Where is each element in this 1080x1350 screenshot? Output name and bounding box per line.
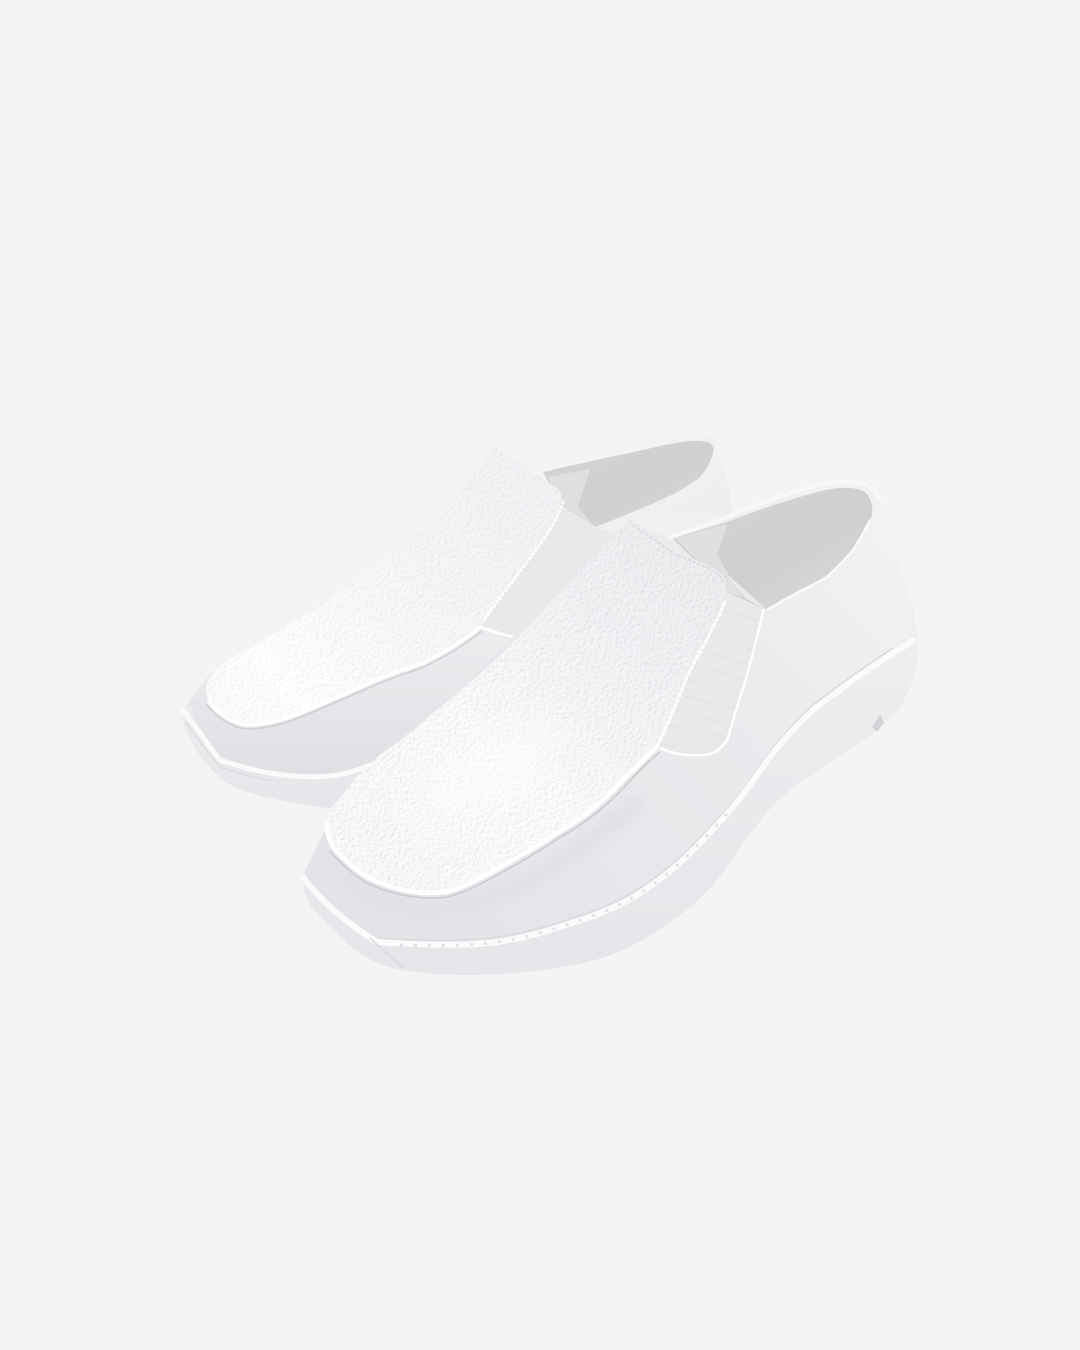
- back shoe rand and outsole: [183, 625, 525, 810]
- back shoe leather grain: [207, 448, 560, 723]
- front shoe seam shadow: [329, 752, 660, 898]
- back shoe seam shadow: [207, 631, 482, 729]
- front shoe lining partition: [675, 524, 743, 598]
- front shoe top stitching: [633, 525, 723, 584]
- front shoe insole peek: [728, 575, 767, 610]
- front shoe: [303, 482, 918, 975]
- front shoe inner lining: [672, 488, 872, 610]
- back shoe rand upper surface: [190, 627, 525, 777]
- back shoe lining partition: [548, 469, 595, 527]
- front shoe elastic ribbing: [669, 610, 760, 738]
- front shoe ridge stitch marks: [400, 807, 733, 946]
- front shoe rand shading: [345, 800, 640, 909]
- back shoe: [180, 430, 733, 810]
- front shoe vamp: [327, 519, 727, 893]
- front shoe vamp seam: [327, 747, 657, 893]
- front shoe inner collar edge: [767, 520, 870, 610]
- front shoe outsole tread: [872, 715, 884, 732]
- back shoe upper vamp: [206, 447, 562, 725]
- back shoe inner lining: [543, 441, 714, 527]
- front shoe sole ridge: [303, 640, 913, 945]
- front shoe elastic gusset: [660, 593, 763, 755]
- back shoe ridge shadow: [186, 722, 272, 781]
- front shoe outsole silhouette: [303, 500, 918, 975]
- front shoe elastic outer seam: [660, 609, 764, 755]
- back shoe elastic gusset: [480, 506, 640, 640]
- back shoe sole ridge: [183, 710, 370, 777]
- front shoe ridge inner shadow: [380, 648, 893, 940]
- back shoe seam: [208, 627, 480, 725]
- front shoe collar edge: [668, 482, 880, 538]
- product photo: pair of white slip-on shoes: [183, 440, 894, 975]
- back shoe stitching: [484, 500, 564, 620]
- front shoe vamp highlight: [417, 715, 561, 821]
- back shoe elastic lower seam: [480, 627, 525, 640]
- front shoe vamp side stitching: [657, 600, 725, 747]
- back shoe heel panel: [540, 434, 733, 545]
- front shoe toe break line: [370, 938, 403, 968]
- front shoe leather grain: [320, 510, 735, 900]
- front shoe quarter, heel and toe rand: [303, 482, 910, 945]
